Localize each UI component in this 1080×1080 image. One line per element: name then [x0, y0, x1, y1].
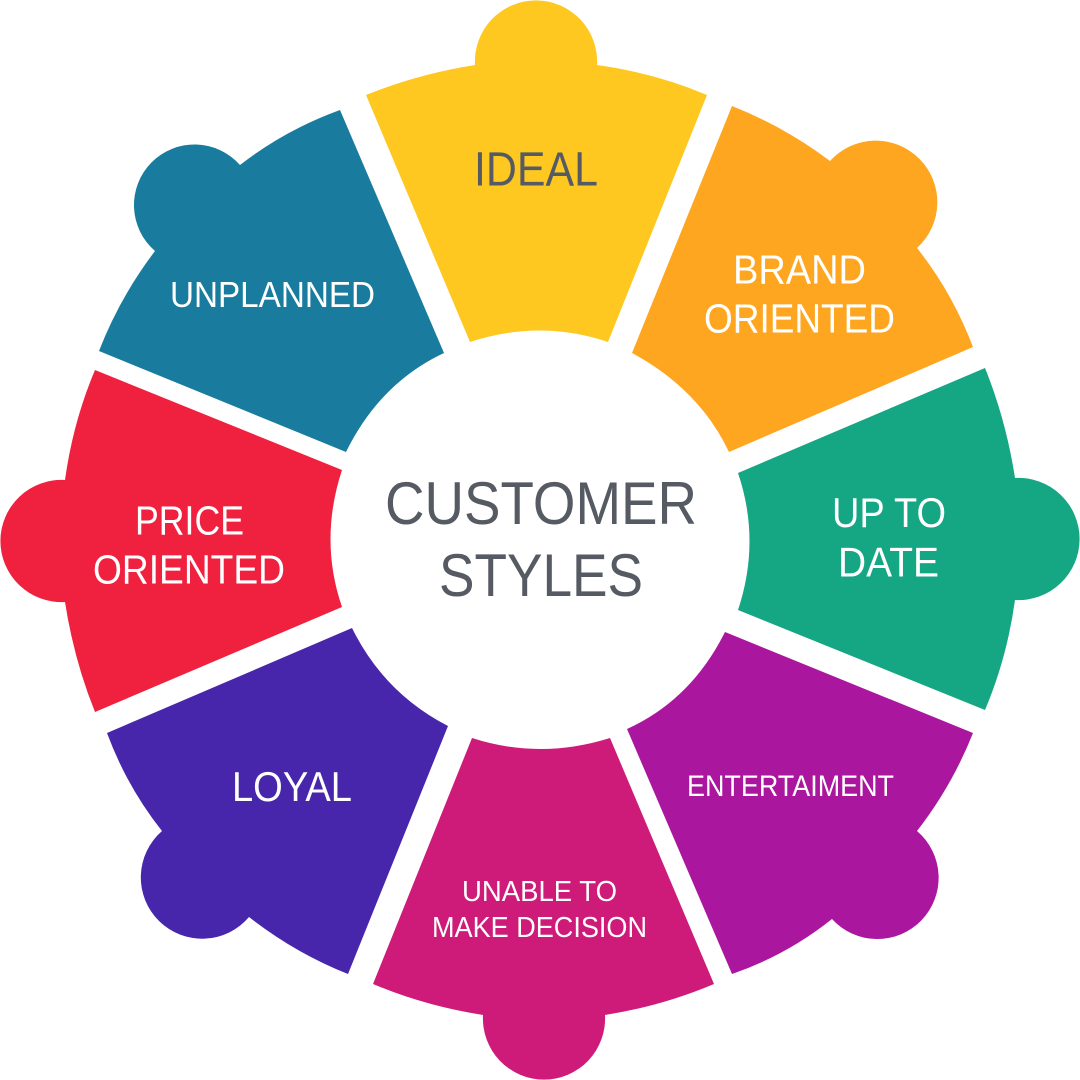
center title: CUSTOMER [385, 470, 697, 537]
segment: loyal: LOYAL [232, 763, 352, 810]
segment: price oriented [0, 370, 342, 712]
segment: unplanned: UNPLANNED [170, 274, 375, 315]
segment: up to date: UP TO [832, 489, 946, 536]
segment: ideal [366, 0, 707, 342]
segment: entertainment [627, 632, 973, 974]
segment: entertainment: ENTERTAIMENT [687, 770, 894, 803]
segment: price oriented: ORIENTED [93, 546, 285, 592]
segment: unable to make decision: MAKE DECISION [432, 912, 647, 944]
segment: unplanned [99, 110, 444, 452]
segment: ideal: IDEAL [474, 144, 598, 197]
segment: unable to make decision: UNABLE TO [462, 876, 617, 908]
segment: brand oriented [632, 106, 973, 452]
segment: up to date [738, 368, 1080, 710]
segment: unable to make decision [373, 738, 714, 1080]
segment: loyal [107, 628, 448, 974]
segment: price oriented: PRICE [135, 498, 244, 544]
center title: STYLES [439, 542, 643, 609]
segment: brand oriented: ORIENTED [704, 296, 895, 342]
center title [385, 470, 697, 609]
segment: brand oriented: BRAND [733, 246, 866, 292]
segment: up to date: DATE [838, 538, 939, 586]
